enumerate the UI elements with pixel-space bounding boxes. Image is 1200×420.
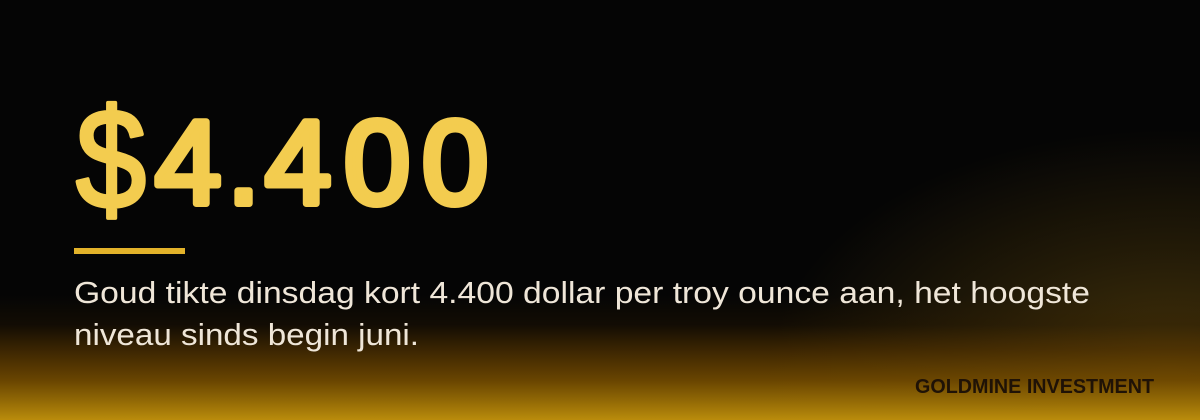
body text: niveau sinds begin juni. — [74, 317, 419, 352]
headline figure: $4.400: $ — [76, 80, 146, 239]
headline figure: $4.400 — [76, 80, 488, 239]
headline figure: $4.400: 4.400 — [155, 96, 488, 230]
body text: Goud tikte dinsdag kort 4.400 dollar per troy ounce aan, het hoogste — [74, 275, 1090, 310]
source label: GOLDMINE INVESTMENT — [915, 376, 1154, 398]
body text — [74, 275, 1090, 352]
accent divider — [74, 248, 185, 254]
